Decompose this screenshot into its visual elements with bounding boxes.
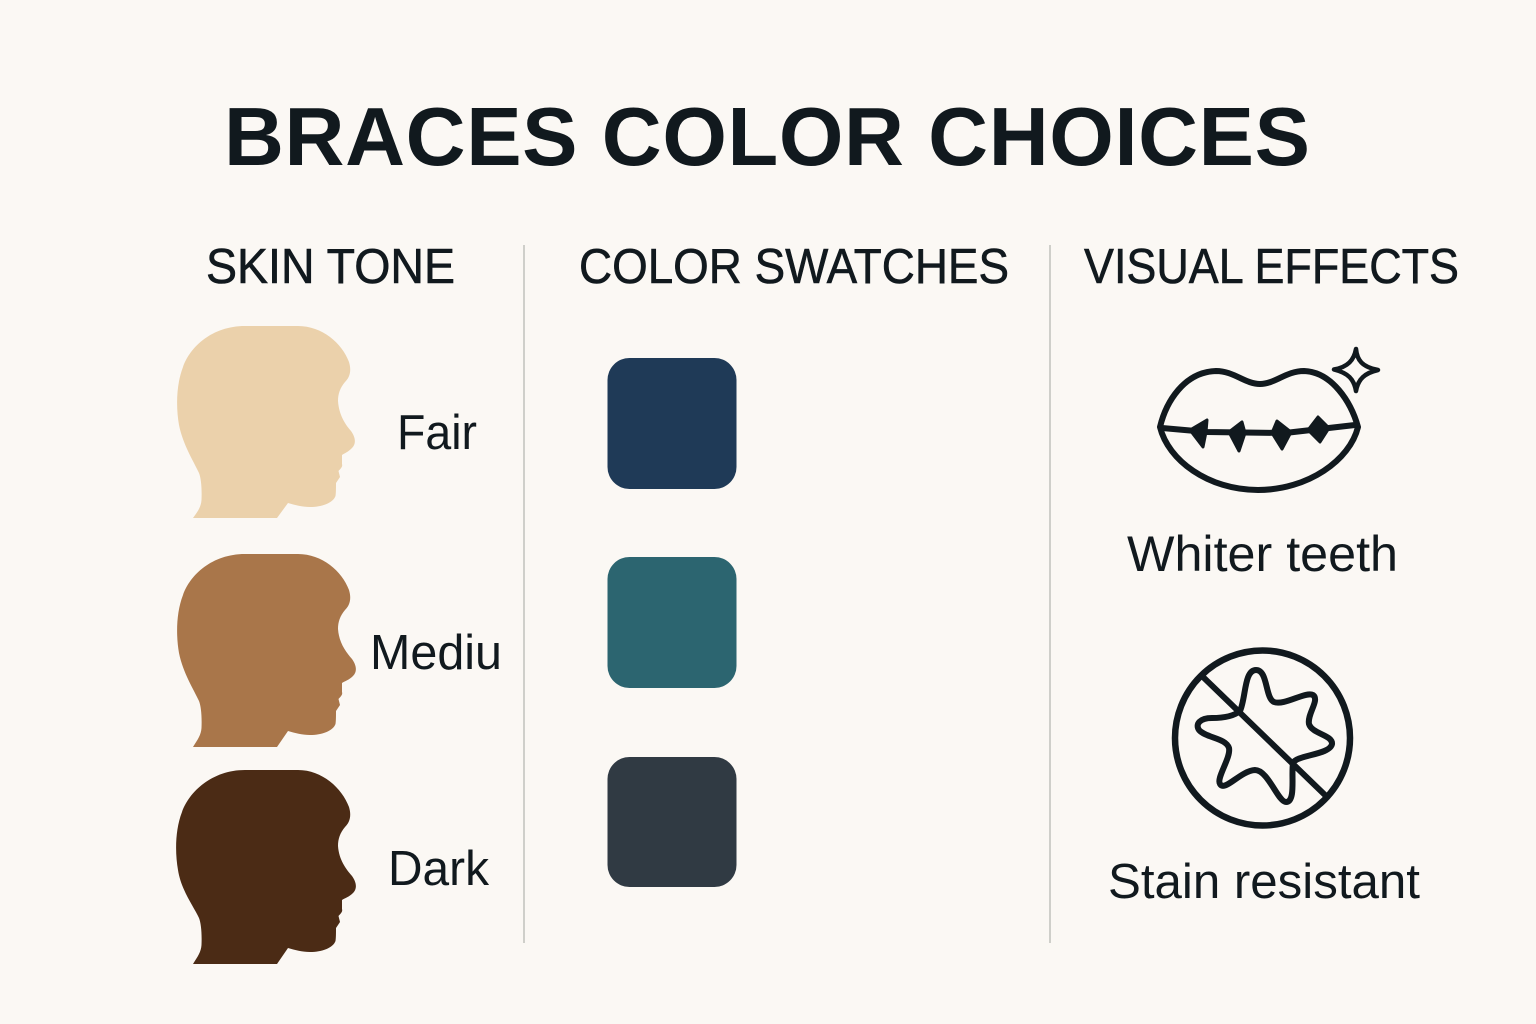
- panel: color swatches: [579, 240, 1009, 887]
- column divider: left: [523, 245, 525, 943]
- title: BRACES COLOR CHOICES: [224, 90, 1310, 183]
- label: medium (clipped in original): Mediu: [370, 626, 502, 680]
- label: stain resistant: Stain resistant: [1108, 855, 1420, 909]
- column divider: right: [1049, 245, 1051, 943]
- swatch: charcoal: [608, 757, 736, 887]
- swatch: teal: [608, 557, 736, 688]
- icon: lips with braces and sparkle: [1160, 349, 1378, 490]
- label: whiter teeth: Whiter teeth: [1127, 526, 1398, 582]
- heading: visual effects: VISUAL EFFECTS: [1084, 240, 1459, 294]
- panel: skin tone: [176, 240, 502, 964]
- icon: dark head silhouette: [176, 770, 356, 964]
- icon: fair head silhouette: [177, 326, 355, 518]
- icon: stain resistant prohibition: [1175, 650, 1350, 826]
- panel: visual effects: [1084, 240, 1459, 909]
- swatch: navy: [608, 358, 736, 489]
- icon: medium head silhouette: [177, 554, 356, 747]
- heading: color swatches: COLOR SWATCHES: [579, 240, 1009, 294]
- label: dark: Dark: [388, 842, 489, 896]
- label: fair: Fair: [397, 406, 477, 460]
- heading: skin tone: SKIN TONE: [206, 240, 455, 294]
